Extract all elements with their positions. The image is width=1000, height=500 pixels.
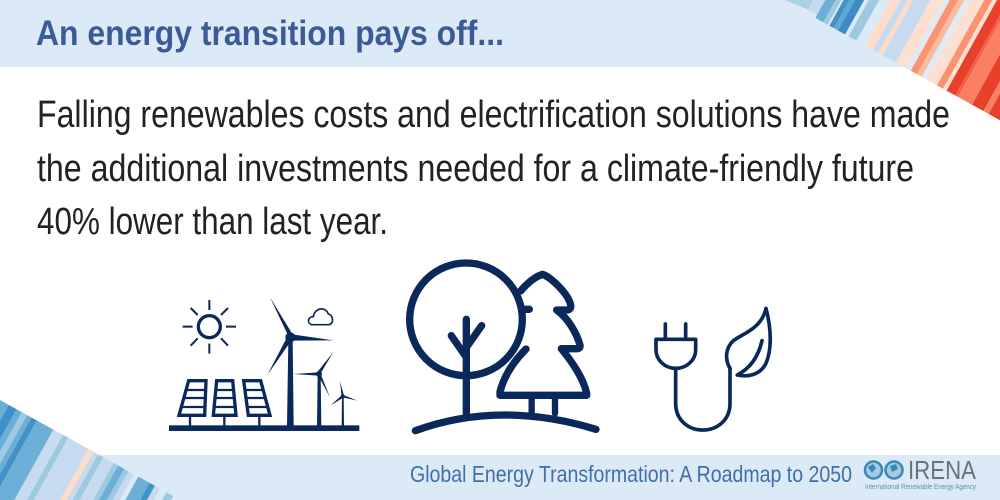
- warming stripes: bottom left: [0, 400, 173, 500]
- icon: round tree: [410, 263, 522, 415]
- warming stripes: top right: [785, 0, 1000, 120]
- footer band: [0, 455, 1000, 500]
- icon: medium wind turbine: [293, 352, 333, 426]
- hill: [415, 415, 596, 431]
- icon: twin globes: [865, 462, 902, 478]
- header band: [0, 0, 1000, 120]
- icon: solar panels and wind turbines: [169, 297, 359, 431]
- icon: plug and leaf: [656, 308, 770, 430]
- logo tagline: International Renewable Energy Agency: [865, 482, 976, 491]
- body text: 40% lower than last year.: [37, 201, 388, 243]
- title: An energy transition pays off...: [36, 14, 504, 53]
- ground line: [169, 425, 359, 431]
- body text: [37, 94, 950, 243]
- icon: plug: [656, 324, 696, 368]
- icon: small wind turbine: [331, 381, 357, 426]
- IRENA logo: [865, 455, 977, 491]
- icon: trees on a hill: [410, 263, 596, 431]
- icon: leaf: [727, 308, 770, 376]
- icon: fir tree: [500, 274, 587, 413]
- cord: [676, 368, 730, 430]
- footer citation: Global Energy Transformation: A Roadmap to 2050: [410, 461, 852, 487]
- icon: sun: [183, 300, 236, 354]
- icon: solar panels: [179, 381, 270, 426]
- icon: cloud: [308, 309, 333, 325]
- icon: large wind turbine: [267, 297, 333, 426]
- logo wordmark: IRENA: [908, 455, 977, 485]
